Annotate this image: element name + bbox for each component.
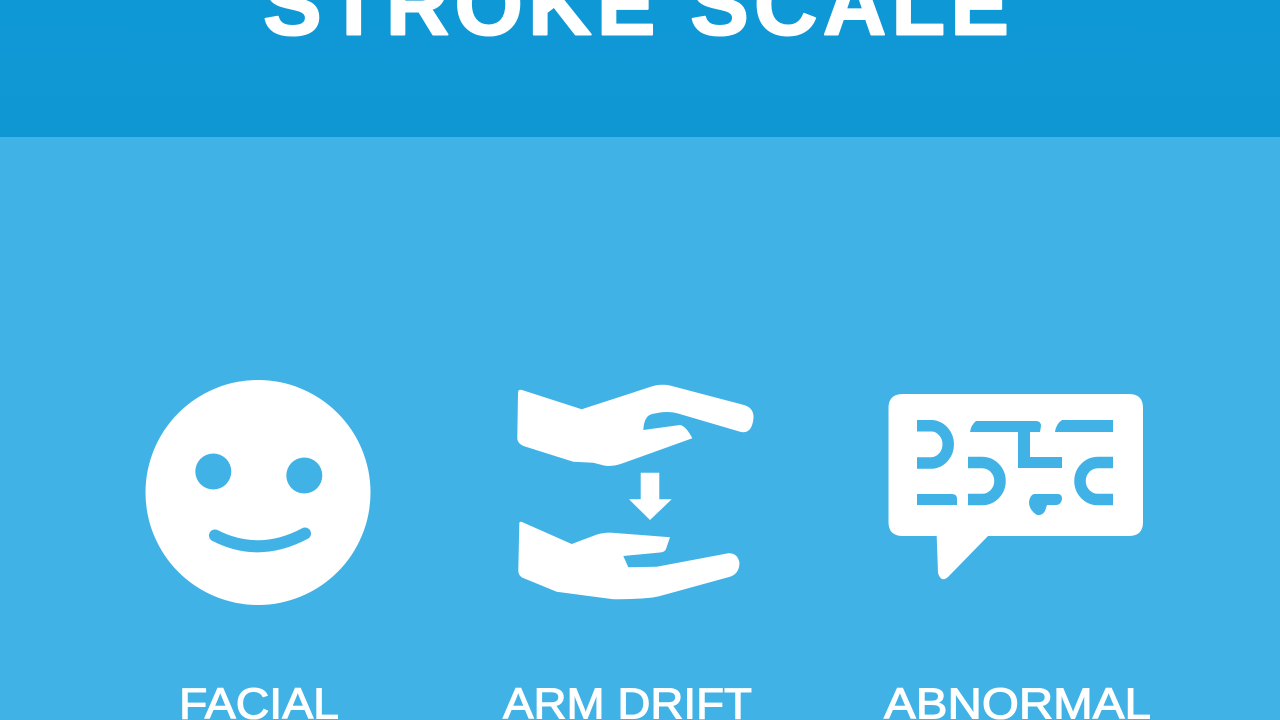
icon: smiling face — [146, 380, 370, 605]
icon: garbled speech bubble — [888, 394, 1143, 579]
panel: header band — [0, 0, 1280, 137]
icon: arm drift hands — [517, 385, 754, 599]
